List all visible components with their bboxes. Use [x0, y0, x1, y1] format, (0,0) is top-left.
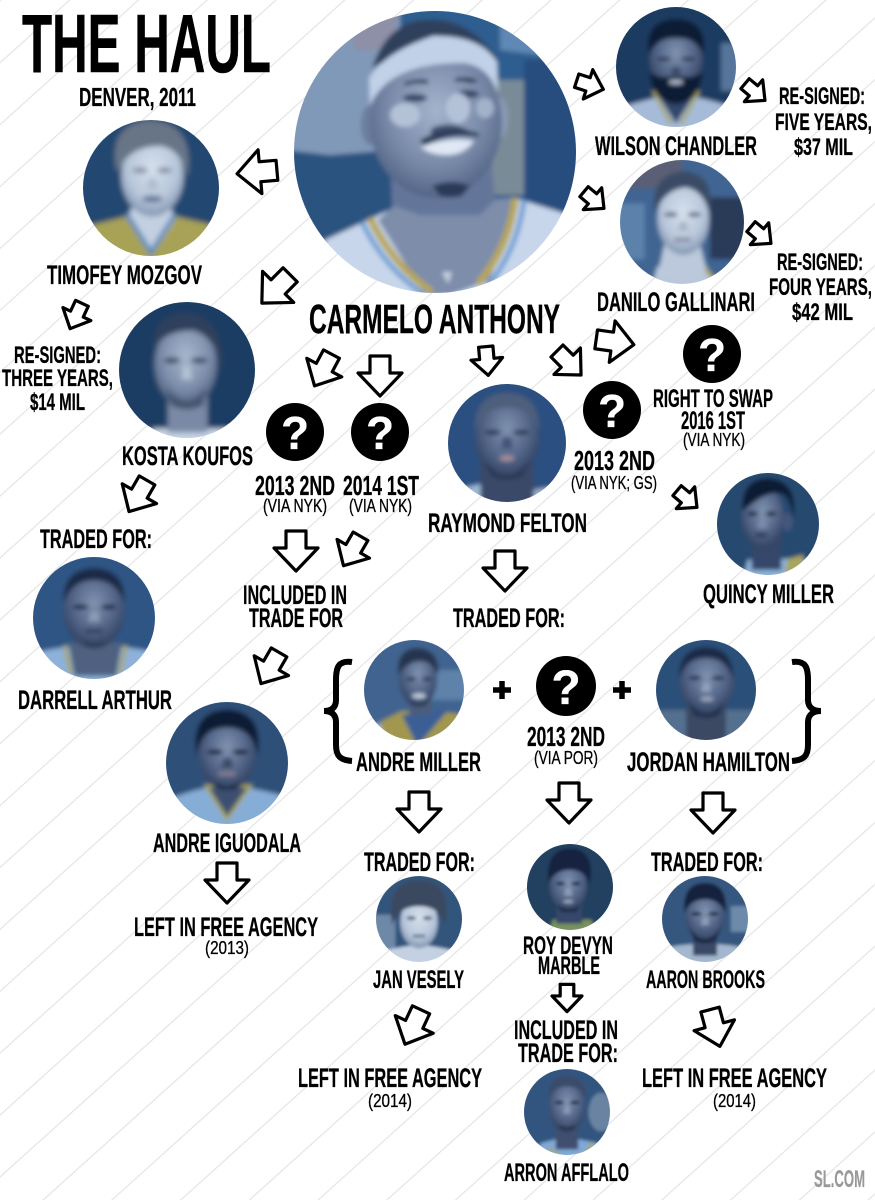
arrow: to Koufos — [246, 259, 306, 319]
arrow: to swap right — [593, 319, 637, 365]
icon: pick question mark 2014 1st: ? — [366, 407, 394, 459]
portrait: Aaron Brooks — [662, 876, 748, 962]
label: right to swap pick — [653, 385, 773, 450]
label: Mozgov contract: RE-SIGNED: — [14, 342, 101, 369]
label: 2014 1st via NYK — [343, 470, 419, 516]
label: Vesely left in free agency: LEFT IN FREE AGENCY — [298, 1063, 482, 1093]
portrait: Darrell Arthur — [33, 557, 155, 679]
label: right to swap pick: 2016 1ST — [681, 407, 745, 435]
label: Iguodala left in free agency: (2013) — [205, 938, 249, 958]
portrait: Carmelo Anthony — [294, 11, 576, 293]
icon: pick question mark 2013 2nd via NYK GS — [583, 381, 641, 439]
label: Koufos traded for: TRADED FOR: — [40, 524, 152, 554]
subtitle: Denver, 2011: DENVER, 2011 — [79, 82, 196, 112]
label: Carmelo Anthony: CARMELO ANTHONY — [309, 296, 560, 342]
left brace — [324, 662, 352, 761]
label: Mozgov contract — [2, 342, 113, 416]
label: 2013 2nd via NYK — [255, 470, 335, 516]
portrait: Andre Iguodala — [166, 702, 288, 824]
label: Hamilton traded for: TRADED FOR: — [651, 847, 763, 877]
arrow: Brooks left — [690, 1004, 740, 1052]
portrait: Andre Miller — [364, 640, 464, 740]
label: Roy Devyn Marble — [523, 932, 613, 980]
label: Aaron Brooks: AARON BROOKS — [646, 966, 765, 994]
label: Mozgov contract: THREE YEARS, — [2, 365, 113, 392]
label: 2014 1st via NYK: (VIA NYK) — [349, 496, 412, 516]
portrait: Jordan Hamilton — [656, 640, 756, 740]
label: Iguodala left in free agency: LEFT IN FREE AGENCY — [134, 912, 318, 942]
label: Iguodala left in free agency — [134, 912, 318, 958]
label: 2013 2nd via POR: 2013 2ND — [527, 721, 605, 752]
label: Gallinari contract — [769, 249, 872, 326]
arrow: 2014 1st included in trade — [327, 527, 377, 575]
label: 2014 1st via NYK: 2014 1ST — [343, 470, 419, 501]
icon: pick question mark 2013 2nd via POR: ? — [551, 662, 581, 715]
label: Jan Vesely: JAN VESELY — [373, 966, 464, 994]
label: Brooks left in free agency — [642, 1063, 827, 1111]
icon: pick question mark right to swap: ? — [698, 329, 726, 381]
label: right to swap pick: RIGHT TO SWAP — [653, 385, 773, 413]
plus sign — [613, 681, 631, 699]
arrow: to Felton — [470, 345, 504, 377]
label: Arron Afflalo: ARRON AFFLALO — [504, 1159, 629, 1187]
portrait: Jan Vesely — [376, 876, 462, 962]
label: Andre Iguodala: ANDRE IGUODALA — [153, 828, 301, 858]
arrow: to Iguodala — [244, 643, 296, 693]
arrow: to Chandler — [572, 66, 608, 104]
label: Wilson Chandler: WILSON CHANDLER — [595, 131, 757, 161]
label: 2013 2nd via NYK: 2013 2ND — [255, 470, 335, 501]
label: Vesely left in free agency — [298, 1063, 482, 1111]
label: Marble included in trade for: TRADE FOR: — [518, 1038, 618, 1068]
label: Danilo Gallinari: DANILO GALLINARI — [597, 287, 755, 317]
label: Miller traded for: TRADED FOR: — [364, 847, 475, 877]
arrow: Marble included — [552, 984, 582, 1012]
label: Andre Miller: ANDRE MILLER — [356, 747, 481, 777]
label: included in trade for: INCLUDED IN — [243, 580, 347, 610]
arrow: Gallinari re-signing — [742, 216, 780, 254]
arrow: Felton traded — [483, 551, 527, 591]
arrow: to Mozgov — [235, 148, 279, 196]
arrow: Miller traded — [397, 792, 441, 832]
portrait: Arron Afflalo — [524, 1069, 610, 1155]
label: 2013 2nd via POR: (VIA POR) — [534, 748, 598, 768]
label: Felton traded for: TRADED FOR: — [453, 603, 565, 633]
label: 2013 2nd via NYK: (VIA NYK) — [263, 496, 327, 516]
arrow: Hamilton traded — [691, 793, 735, 833]
arrow: Koufos traded — [112, 471, 164, 521]
arrow: to 2013 2nd via NYK GS — [544, 338, 594, 388]
icon: pick question mark 2013 2nd: ? — [281, 407, 309, 459]
portrait: Roy Devyn Marble — [527, 844, 613, 930]
icon: pick question mark right to swap — [683, 325, 741, 383]
label: 2013 2nd via NYK; GS — [571, 445, 657, 493]
label: Brooks left in free agency: (2014) — [713, 1091, 756, 1111]
portrait: Kosta Koufos — [119, 302, 255, 438]
plus sign — [493, 681, 511, 699]
label: Marble included in trade for — [514, 1015, 618, 1068]
right brace — [792, 662, 821, 761]
icon: pick question mark 2013 2nd via NYK GS: ? — [598, 385, 626, 437]
arrow: Iguodala left — [205, 863, 249, 903]
icon: pick question mark 2014 1st — [351, 403, 409, 461]
arrow: 2013 2nd via POR to Marble — [547, 783, 591, 823]
label: included in trade for: TRADE FOR — [249, 603, 343, 633]
label: Marble included in trade for: INCLUDED IN — [514, 1015, 618, 1045]
icon: pick question mark 2013 2nd — [266, 403, 324, 461]
arrow: to Mozgov re-signing — [56, 297, 96, 335]
label: included in trade for — [243, 580, 347, 633]
portrait: Danilo Gallinari — [620, 160, 744, 284]
label: 2013 2nd via NYK; GS: 2013 2ND — [574, 445, 655, 476]
arrow: to Gallinari — [575, 181, 613, 219]
label: Mozgov contract: $14 MIL — [30, 389, 85, 416]
portrait: Wilson Chandler — [616, 7, 736, 127]
label: Kosta Koufos: KOSTA KOUFOS — [122, 441, 253, 471]
label: Timofey Mozgov: TIMOFEY MOZGOV — [47, 260, 202, 290]
arrow: 2013 2nd included in trade — [274, 531, 318, 571]
label: 2013 2nd via POR — [527, 721, 605, 768]
label: Raymond Felton: RAYMOND FELTON — [428, 508, 587, 538]
label: 2013 2nd via NYK; GS: (VIA NYK; GS) — [571, 473, 657, 493]
arrow: Vesely left — [386, 1001, 440, 1053]
label: Darrell Arthur: DARRELL ARTHUR — [18, 685, 172, 715]
label: Chandler contract — [775, 83, 872, 161]
portrait: Quincy Miller — [717, 473, 819, 575]
portrait: Raymond Felton — [448, 384, 566, 502]
label: Vesely left in free agency: (2014) — [368, 1091, 412, 1111]
label: right to swap pick: (VIA NYK) — [683, 430, 745, 450]
arrow: to 2013 2nd pick — [297, 345, 349, 395]
label: Roy Devyn Marble: ROY DEVYN — [523, 932, 613, 960]
arrow: to Quincy Miller — [668, 480, 706, 518]
arrow: Chandler re-signing — [736, 73, 774, 111]
label: Roy Devyn Marble: MARBLE — [538, 952, 600, 980]
portrait: Timofey Mozgov — [83, 120, 219, 256]
icon: pick question mark 2013 2nd via POR — [536, 656, 596, 716]
arrow: to 2014 1st pick — [358, 356, 402, 396]
